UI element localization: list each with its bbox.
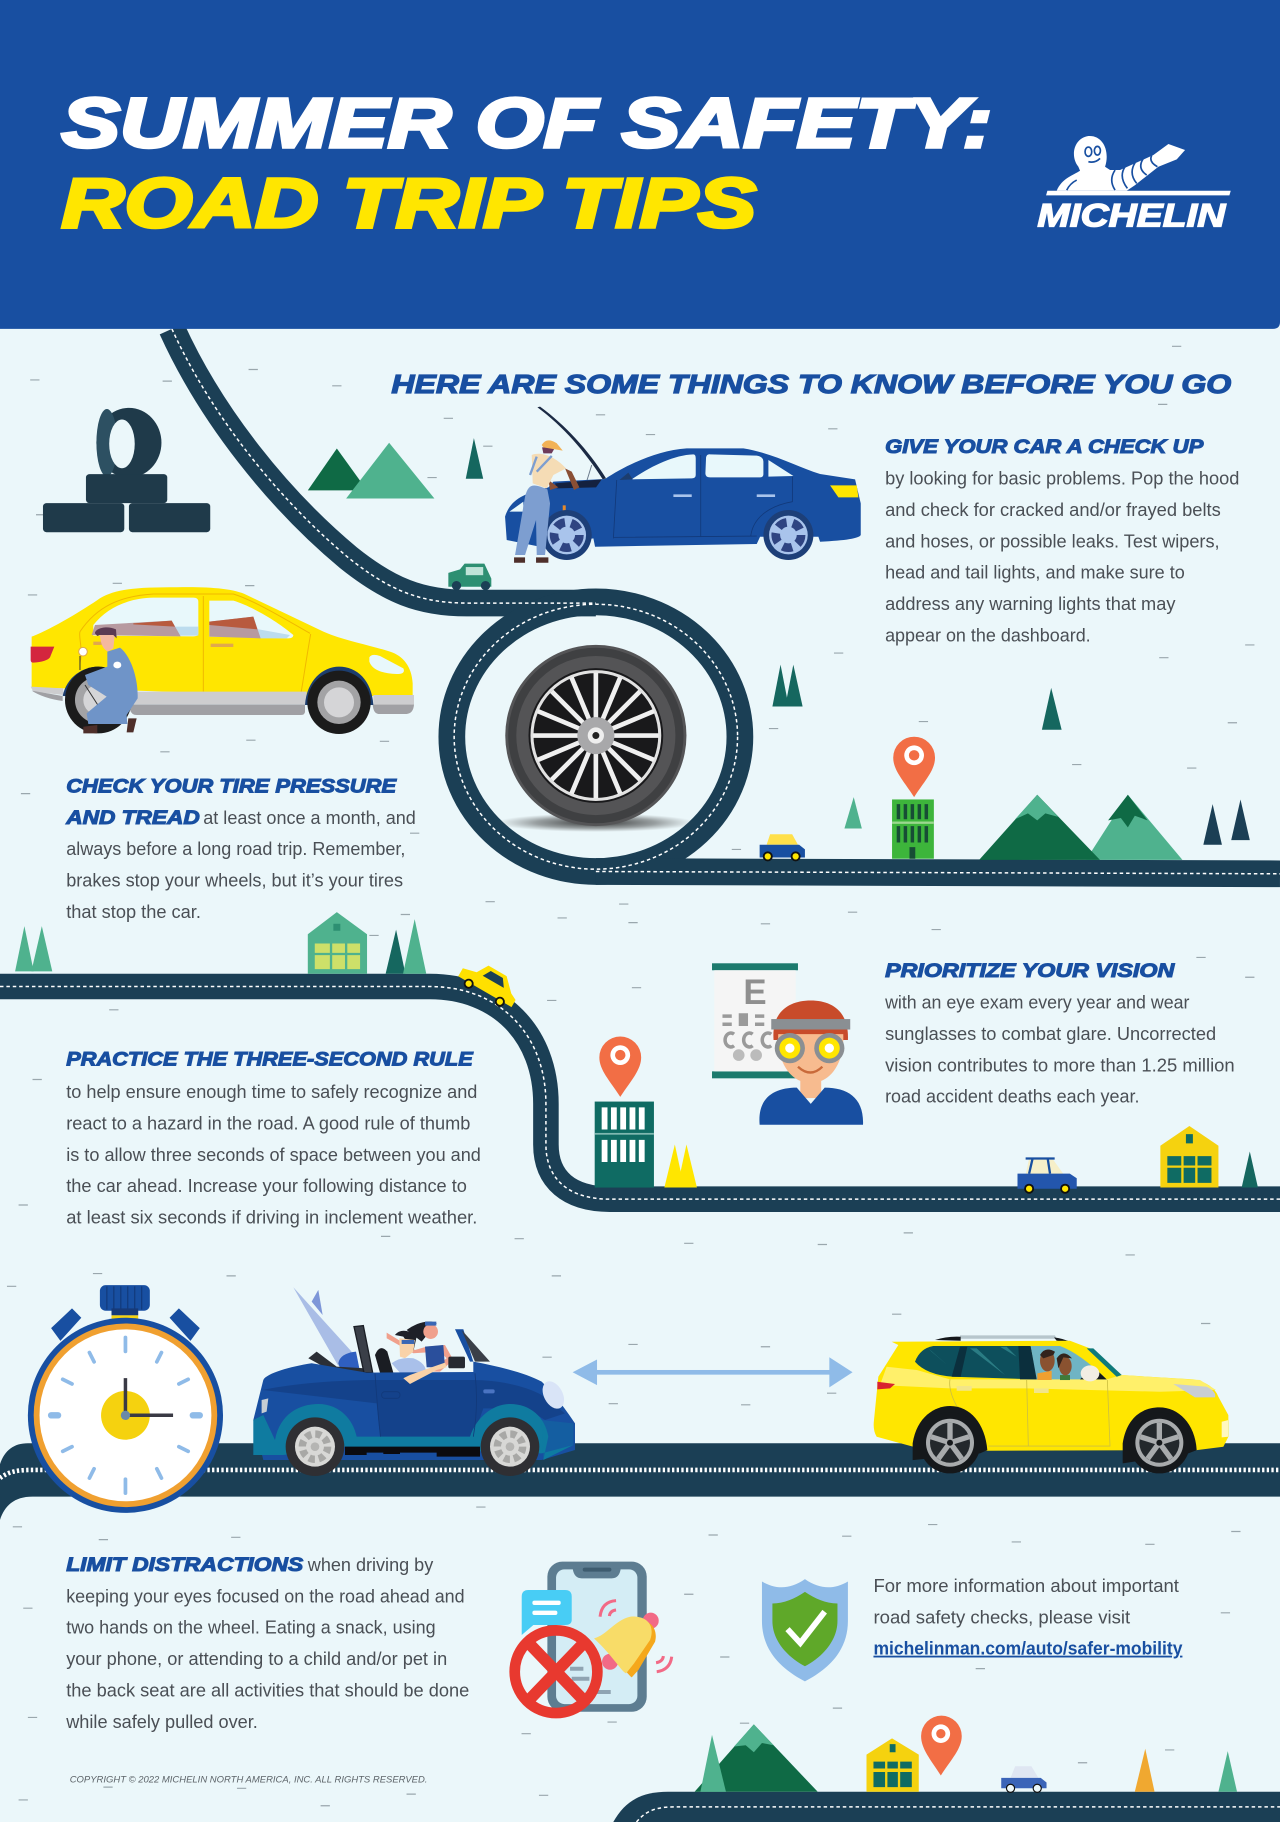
illustration: yellow car with technician [31, 587, 414, 734]
icon: bottom small car [1001, 1766, 1047, 1792]
logo: Michelin man and wordmark [1037, 136, 1231, 233]
icon: no phone distraction [515, 1562, 672, 1713]
text block: limit distractions: two hands on the wheel. Eating a snack, using [66, 1618, 436, 1638]
text block: limit distractions [65, 1555, 469, 1732]
text block: three-second rule [66, 1050, 481, 1228]
icon: stopwatch [28, 1285, 223, 1513]
icon: small blue car [1017, 1159, 1077, 1193]
text block: give your car a check up: and hoses, or possible leaks. Test wipers, [885, 531, 1220, 551]
icon: tire stack [43, 408, 210, 532]
heading: things to know: HERE ARE SOME THINGS TO KNOW BEFORE YOU GO [391, 371, 1231, 399]
figure: technician [79, 627, 138, 733]
text block: check tire pressure: at least once a month, and [203, 808, 416, 828]
text block: check tire pressure: CHECK YOUR TIRE PRESSURE [66, 776, 397, 797]
text block: three-second rule: PRACTICE THE THREE-SECOND RULE [66, 1050, 474, 1071]
text block: check tire pressure [65, 776, 416, 922]
text block: more information: road safety checks, please visit [873, 1607, 1130, 1627]
icon: bottom mountain and tree [695, 1724, 818, 1792]
illustration: blue car with mechanic [505, 407, 861, 563]
icon: green house [308, 912, 367, 974]
icon: trees beside house [386, 919, 426, 974]
text block: limit distractions: your phone, or attending to a child and/or pet in [66, 1649, 447, 1669]
text block: prioritize your vision: road accident deaths each year. [885, 1087, 1139, 1107]
text block: more information [873, 1576, 1182, 1659]
arrow: following distance [573, 1357, 853, 1387]
text block: give your car a check up: address any warning lights that may [885, 594, 1176, 614]
icon: teal tree [1242, 1152, 1258, 1188]
icon: left trees [15, 926, 52, 971]
text block: three-second rule: is to allow three seconds of space between you and [66, 1145, 481, 1165]
icon: safety shield [762, 1579, 848, 1681]
figure: passengers [387, 1321, 453, 1377]
text block: give your car a check up [885, 437, 1239, 645]
text block: give your car a check up: head and tail lights, and make sure to [885, 563, 1185, 583]
icon: map pin with teal tower [595, 1036, 654, 1188]
road: upper spiral road with tire loop [172, 329, 1280, 874]
text block: prioritize your vision [884, 961, 1235, 1107]
road: wide straight road [0, 1443, 1280, 1520]
text block: check tire pressure: that stop the car. [66, 902, 201, 922]
title [62, 84, 992, 242]
text block: prioritize your vision: with an eye exam every year and wear [884, 993, 1189, 1013]
icon: snow-capped mountains [979, 795, 1182, 860]
text block: more information: For more information about important [873, 1576, 1179, 1596]
title: ROAD TRIP TIPS [62, 164, 756, 242]
icon: eye exam [712, 963, 863, 1125]
icon: eye exam: E [743, 973, 767, 1012]
text block: prioritize your vision: sunglasses to combat glare. Uncorrected [885, 1024, 1216, 1044]
icon: bottom map pin [921, 1716, 962, 1776]
text block: check tire pressure: brakes stop your wheels, but it’s your tires [66, 871, 403, 891]
figure: SUV occupants [1037, 1350, 1072, 1380]
illustration: tire in loop [496, 645, 696, 832]
text block: prioritize your vision: vision contributes to more than 1.25 million [885, 1055, 1235, 1075]
copyright: COPYRIGHT © 2022 MICHELIN NORTH AMERICA, INC. ALL RIGHTS RESERVED. [70, 1774, 427, 1784]
text block: three-second rule: to help ensure enough time to safely recognize and [66, 1082, 477, 1102]
title: SUMMER OF SAFETY: [62, 84, 992, 162]
illustration: yellow SUV [874, 1335, 1228, 1473]
icon: yellow taxi on curve [456, 955, 524, 1012]
text block: limit distractions: LIMIT DISTRACTIONS [66, 1555, 303, 1576]
road: bottom corner road [613, 1792, 1280, 1822]
icon: mountains and tree [308, 438, 483, 498]
header banner [0, 0, 1280, 329]
icon: trees right of loop [772, 665, 1250, 845]
text block: limit distractions: when driving by [307, 1555, 434, 1575]
illustration: blue convertible [253, 1287, 575, 1476]
icon: map pin with green tower [892, 737, 935, 859]
text block: give your car a check up: appear on the dashboard. [885, 625, 1091, 645]
text block: three-second rule: at least six seconds if driving in inclement weather. [66, 1208, 477, 1228]
text block: give your car a check up: by looking for basic problems. Pop the hood [885, 469, 1239, 489]
road: middle S-curve road [0, 987, 1280, 1199]
logo: Michelin man and wordmark: MICHELIN [1037, 197, 1226, 233]
icon: yellow house [1160, 1126, 1218, 1188]
figure: mechanic [514, 440, 579, 563]
icon: yellow trees [664, 1145, 697, 1188]
text block: three-second rule: react to a hazard in the road. A good rule of thumb [66, 1113, 470, 1133]
text block: three-second rule: the car ahead. Increase your following distance to [66, 1176, 467, 1196]
icon: bottom trees [1135, 1749, 1237, 1792]
text block: limit distractions: keeping your eyes focused on the road ahead and [66, 1586, 465, 1606]
text block: limit distractions: the back seat are all activities that should be done [66, 1681, 469, 1701]
text block: more information: michelinman.com/auto/safer-mobility [873, 1639, 1182, 1659]
icon: small green car [448, 564, 491, 590]
text block: check tire pressure: always before a long road trip. Remember, [66, 839, 405, 859]
text block: give your car a check up: GIVE YOUR CAR A CHECK UP [885, 437, 1204, 458]
icon: bottom yellow house [866, 1738, 919, 1792]
figure: person with phoropter [759, 1000, 863, 1125]
text block: check tire pressure: AND TREAD [65, 808, 200, 829]
text block: prioritize your vision: PRIORITIZE YOUR VISION [885, 961, 1176, 982]
text block: give your car a check up: and check for cracked and/or frayed belts [885, 500, 1221, 520]
icon: small yellow taxi [760, 834, 805, 860]
text block: limit distractions: while safely pulled over. [65, 1712, 258, 1732]
